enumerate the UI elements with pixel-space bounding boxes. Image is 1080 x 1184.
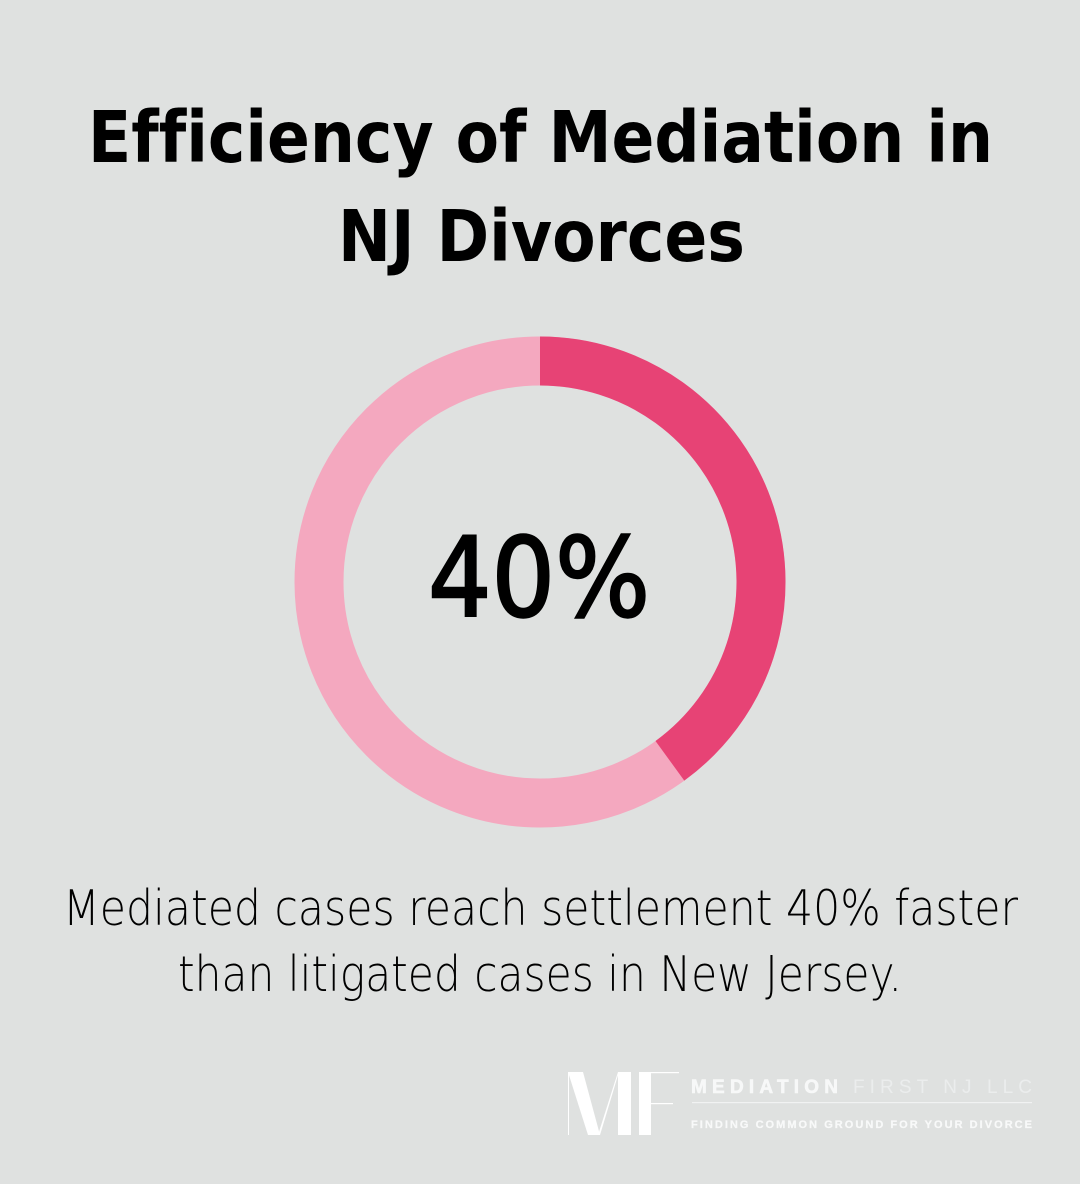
- logo wordmark: MEDIATION: [691, 1077, 838, 1098]
- title: NJ Divorces: [338, 195, 745, 278]
- title: Efficiency of Mediation in: [88, 96, 993, 179]
- title: [88, 96, 993, 278]
- donut remainder: 60 percent: [319, 361, 761, 803]
- logo wordmark: [691, 1077, 1032, 1098]
- logo tagline: FINDING COMMON GROUND FOR YOUR DIVORCE: [691, 1119, 1032, 1131]
- logo wordmark: FIRST NJ LLC: [853, 1077, 1032, 1098]
- logo mark: MF monogram: [568, 1072, 679, 1135]
- description text: than litigated cases in New Jersey.: [178, 946, 902, 1003]
- donut chart: 40 percent: [319, 361, 761, 803]
- donut highlighted segment: 40 percent: [540, 361, 761, 761]
- logo: Mediation First NJ LLC: [568, 1072, 1032, 1135]
- description text: [63, 880, 1019, 1003]
- donut centre value: 40%: [428, 514, 650, 642]
